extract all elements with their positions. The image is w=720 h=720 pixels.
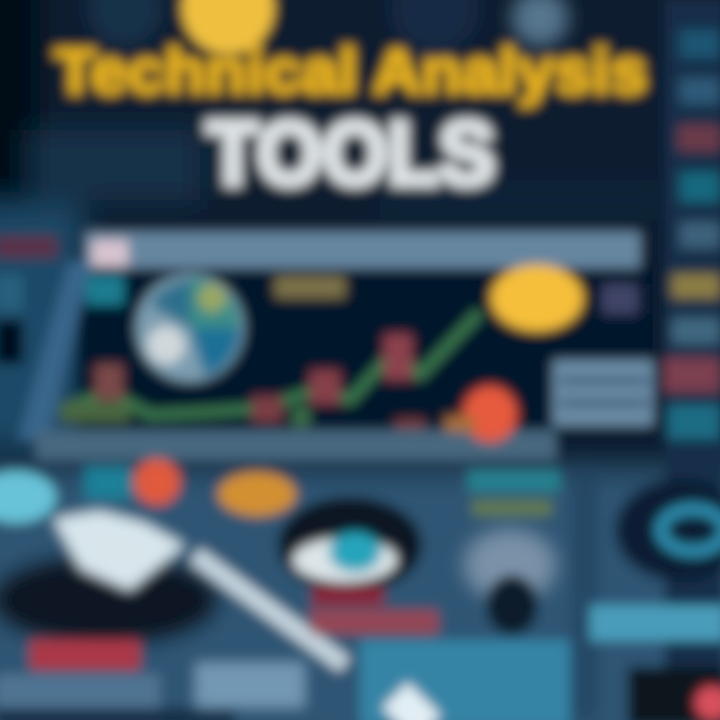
dashboard bottom bar <box>36 430 556 460</box>
cyan bar <box>590 605 720 641</box>
teal tab <box>86 275 124 305</box>
line chart <box>60 312 480 429</box>
panel: lower tools area <box>0 459 720 720</box>
panel: left side strips <box>0 236 57 364</box>
icon: top bar button <box>92 240 128 266</box>
pie chart <box>136 274 244 382</box>
magnifier red base <box>312 586 384 606</box>
dark dial core <box>486 575 538 635</box>
icon: dark circle left <box>87 0 163 48</box>
small purple label <box>602 284 638 314</box>
cyan ring arc <box>661 509 720 551</box>
white hand shape <box>52 510 186 592</box>
dashboard left edge <box>18 262 92 440</box>
orange label <box>218 472 296 516</box>
chart background <box>78 262 653 437</box>
data table block <box>553 360 653 426</box>
icon: yellow sun <box>182 0 274 54</box>
panel: right sidebar <box>664 0 720 720</box>
small yellow label <box>275 276 345 298</box>
icon: red circle <box>134 459 180 505</box>
teal tab <box>84 466 132 500</box>
cyan left shape <box>0 471 56 523</box>
teal column <box>360 640 570 720</box>
magnifier lens <box>293 538 397 582</box>
icon: dark circle right <box>391 0 479 54</box>
magnifier red label <box>310 610 438 634</box>
diagonal pointer <box>195 555 345 665</box>
red and orange marker <box>445 386 517 442</box>
dark ring icon <box>616 480 720 580</box>
magnifier pupil <box>329 532 381 572</box>
top decorative circles <box>87 0 568 54</box>
light panel <box>195 662 305 708</box>
title: TOOLS: TOOLS <box>207 104 495 204</box>
yellow badge <box>491 265 583 331</box>
bottom left bar <box>0 674 160 708</box>
grey dial <box>464 529 556 601</box>
dark strip at bottom <box>0 708 235 720</box>
icon: blue-grey circle <box>512 0 568 46</box>
dark hand shape <box>0 556 217 644</box>
title: Technical Analysis: Technical Analysis <box>55 37 647 107</box>
dashboard top bar <box>86 232 640 268</box>
red bar <box>30 640 140 670</box>
white pointer tip <box>395 695 428 720</box>
magnifier <box>278 497 438 634</box>
right labels <box>468 470 560 492</box>
panel: chart dashboard <box>18 232 653 460</box>
dark lower right box <box>628 667 720 720</box>
dark vertical strip <box>575 470 595 720</box>
magnifier rim <box>278 497 422 593</box>
olive label <box>472 500 552 516</box>
red corner mark <box>695 686 720 720</box>
